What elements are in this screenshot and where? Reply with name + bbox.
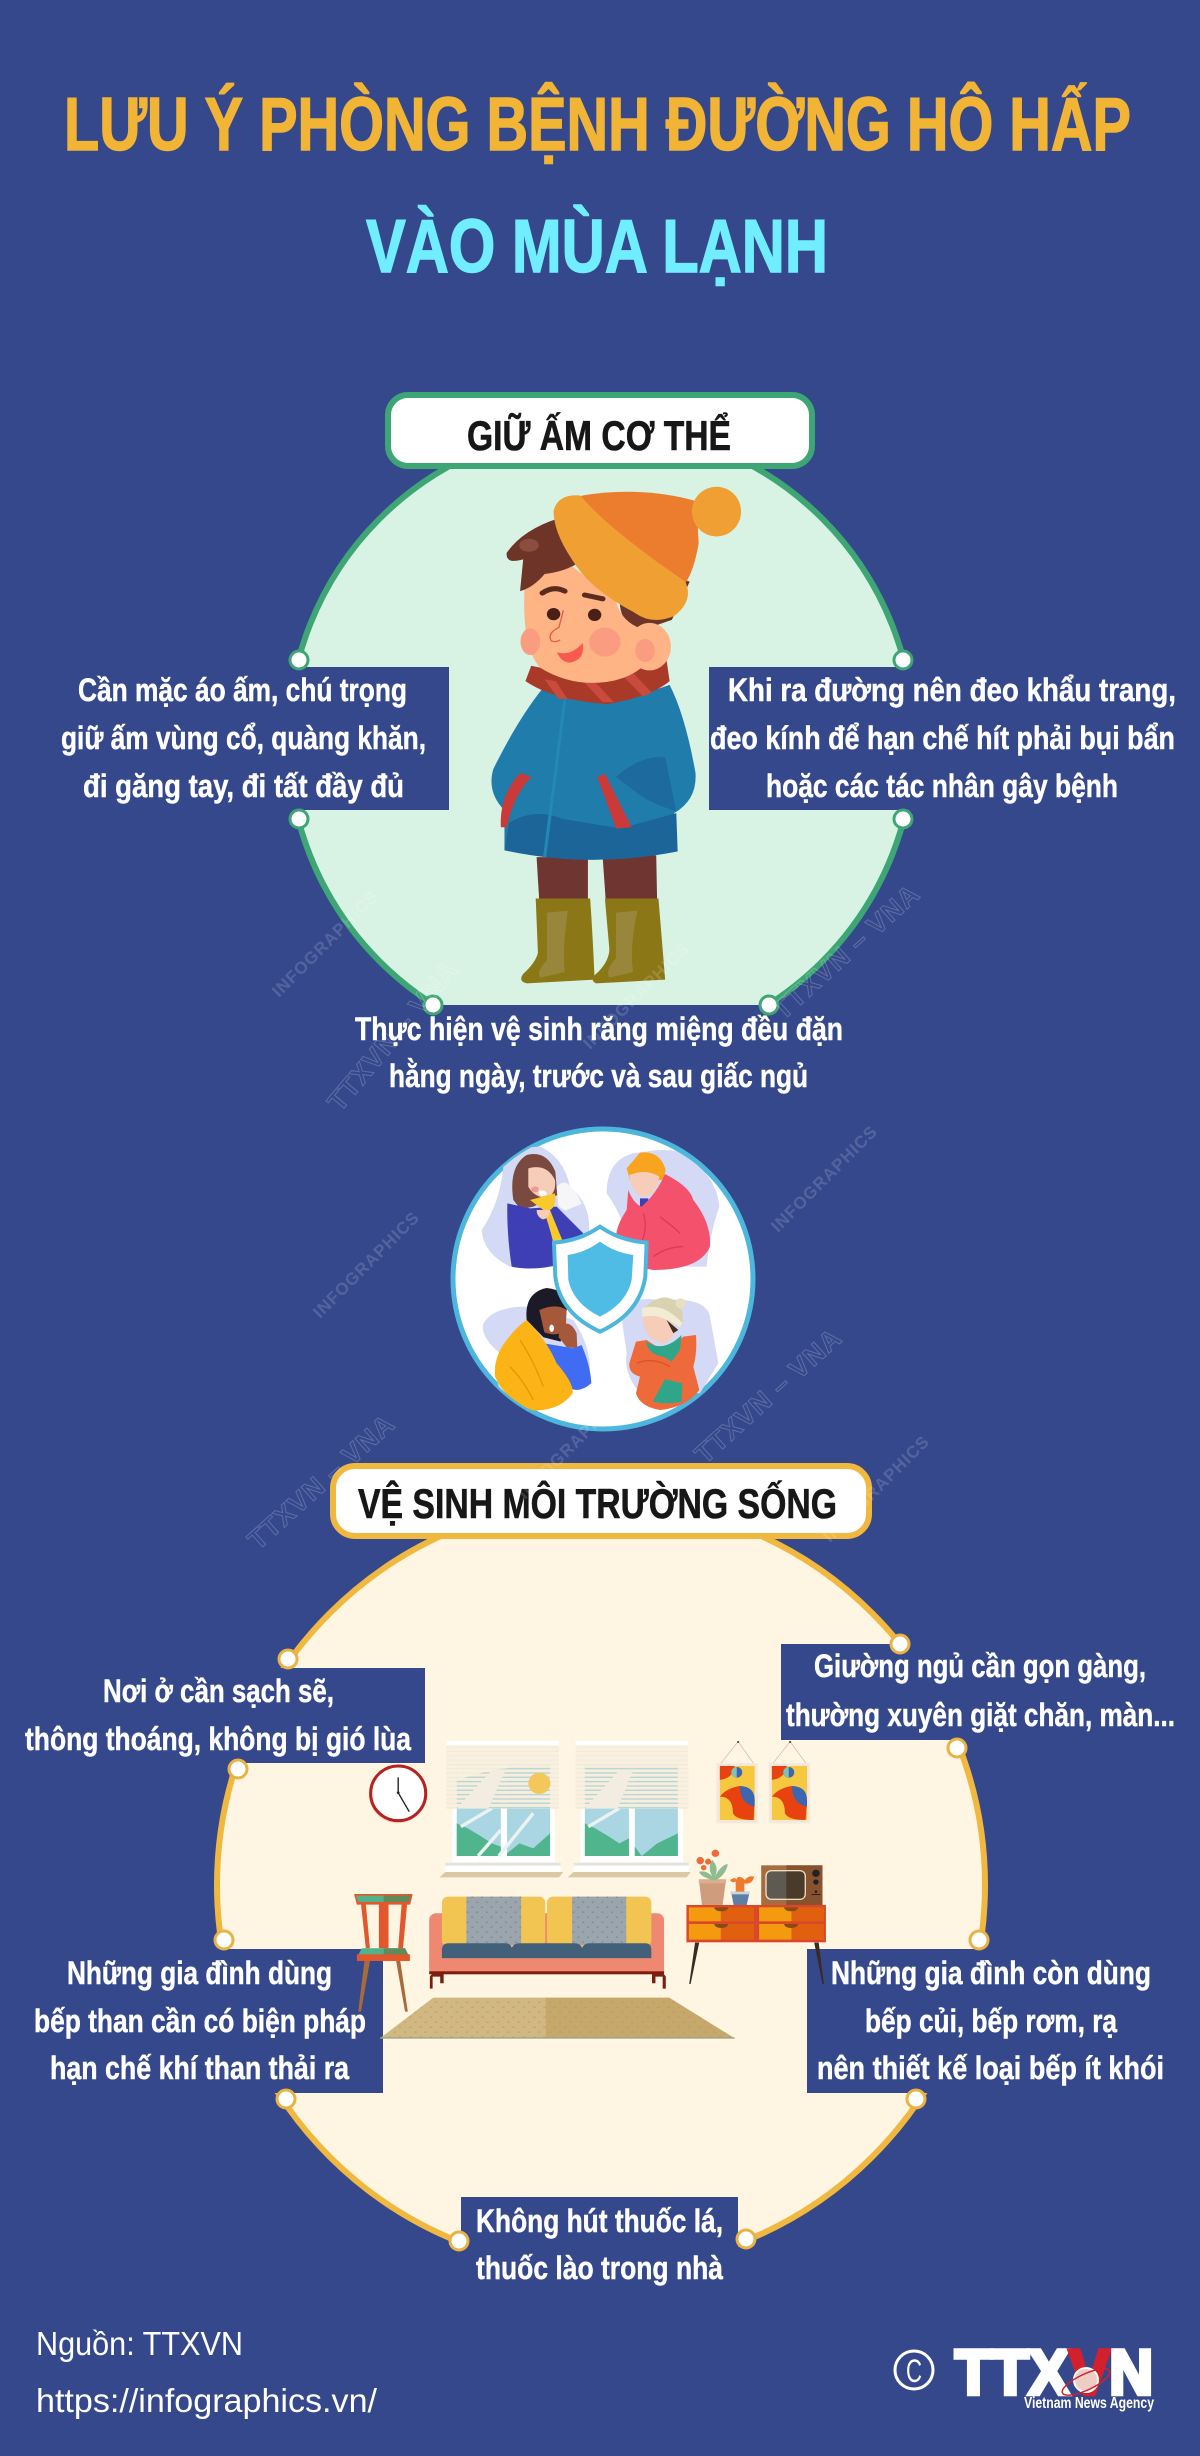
heading pill: GIỮ ẤM CƠ THỂ (467, 411, 731, 459)
text: nơi ở (25, 1673, 411, 1757)
potted plants (696, 1850, 754, 1905)
person 2 (627, 1152, 666, 1180)
text: INFOGRAPHICS (819, 1432, 933, 1546)
connector dots (290, 651, 912, 1014)
text: bếp củi: bếp củi, bếp rơm, rạ (865, 2003, 1117, 2039)
text: TTXVN – VNA (767, 878, 926, 1025)
text: bếp than: hạn chế khí than thải ra (50, 2050, 349, 2086)
text: left advice (61, 672, 426, 804)
text: bottom advice: hằng ngày, trước và sau giấc ngủ (389, 1058, 808, 1094)
wall pictures (716, 1741, 810, 1823)
text: INFOGRAPHICS (767, 1122, 881, 1236)
text: TTXVN – VNA (322, 955, 464, 1117)
television (761, 1865, 822, 1905)
text: thuốc lá: Không hút thuốc lá, (476, 2203, 723, 2239)
sofa (429, 1897, 666, 1989)
illustration: boy in winter clothes (491, 487, 741, 983)
blobs (482, 1147, 719, 1393)
window right (568, 1741, 691, 1877)
connector dots (215, 1635, 988, 2250)
clock (369, 1766, 426, 1823)
yellow circle (217, 1501, 985, 2269)
text: left advice: giữ ấm vùng cổ, quàng khăn, (61, 720, 426, 756)
text: bottom advice (355, 1011, 843, 1094)
rug (380, 1998, 735, 2039)
text: INFOGRAPHICS (579, 939, 693, 1053)
text: right advice (710, 672, 1176, 804)
white circle (453, 1129, 753, 1429)
heading pill: VỆ SINH MÔI TRƯỜNG SỐNG (358, 1479, 837, 1527)
text: TTXVN – VNA (242, 1408, 401, 1555)
panel: vệ sinh môi trường sống (10, 1466, 1190, 2297)
text: left advice: đi găng tay, đi tất đầy đủ (83, 768, 404, 804)
text: thuốc lá (476, 2203, 723, 2286)
person 4 (642, 1297, 683, 1327)
panel: giữ ấm cơ thể (40, 395, 1190, 1094)
footer source: Nguồn: TTXVN (36, 2325, 243, 2362)
illustration: sick people and shield (453, 1129, 753, 1429)
text box backgrounds (10, 1644, 1190, 2297)
logo: TTXVN: C (906, 2353, 922, 2389)
text: bếp củi (817, 1955, 1164, 2086)
text: INFOGRAPHICS (268, 887, 382, 1001)
text: bottom advice: Thực hiện vệ sinh răng miệng đều đặn (355, 1011, 843, 1047)
text: right advice: hoặc các tác nhân gây bệnh (766, 768, 1118, 804)
text: left advice: Cần mặc áo ấm, chú trọng (78, 672, 407, 708)
shield (554, 1227, 647, 1332)
illustration: living room (354, 1741, 826, 2039)
window left (440, 1741, 563, 1877)
title line 2: VÀO MÙA LẠNH (366, 204, 828, 288)
text: INFOGRAPHICS (514, 1389, 628, 1503)
footer source (36, 2325, 378, 2419)
person 3 (526, 1288, 567, 1342)
text: giường ngủ (786, 1648, 1175, 1733)
text: nơi ở: Nơi ở cần sạch sẽ, (103, 1673, 334, 1709)
heading pill (388, 395, 812, 466)
text: thuốc lá: thuốc lào trong nhà (476, 2250, 723, 2286)
text: INFOGRAPHICS (309, 1208, 423, 1322)
cabinet (686, 1905, 826, 1984)
text: bếp than: bếp than cần có biện pháp (34, 2003, 366, 2039)
logo: TTXVN: Vietnam News Agency (1024, 2395, 1154, 2412)
text: nơi ở: thông thoáng, không bị gió lùa (25, 1721, 411, 1757)
text: TTXVN – VNA (689, 1322, 848, 1469)
heading pill (333, 1466, 869, 1536)
green circle (288, 427, 914, 1053)
footer source: https://infographics.vn/ (36, 2382, 378, 2419)
text box backgrounds (40, 667, 1190, 1065)
chair (354, 1894, 413, 2012)
logo: TTXVN: TTXVN (955, 2338, 1153, 2408)
text: bếp than (34, 1955, 366, 2086)
text: bếp than: Những gia đình dùng (67, 1955, 332, 1991)
person 1 (512, 1154, 557, 1209)
